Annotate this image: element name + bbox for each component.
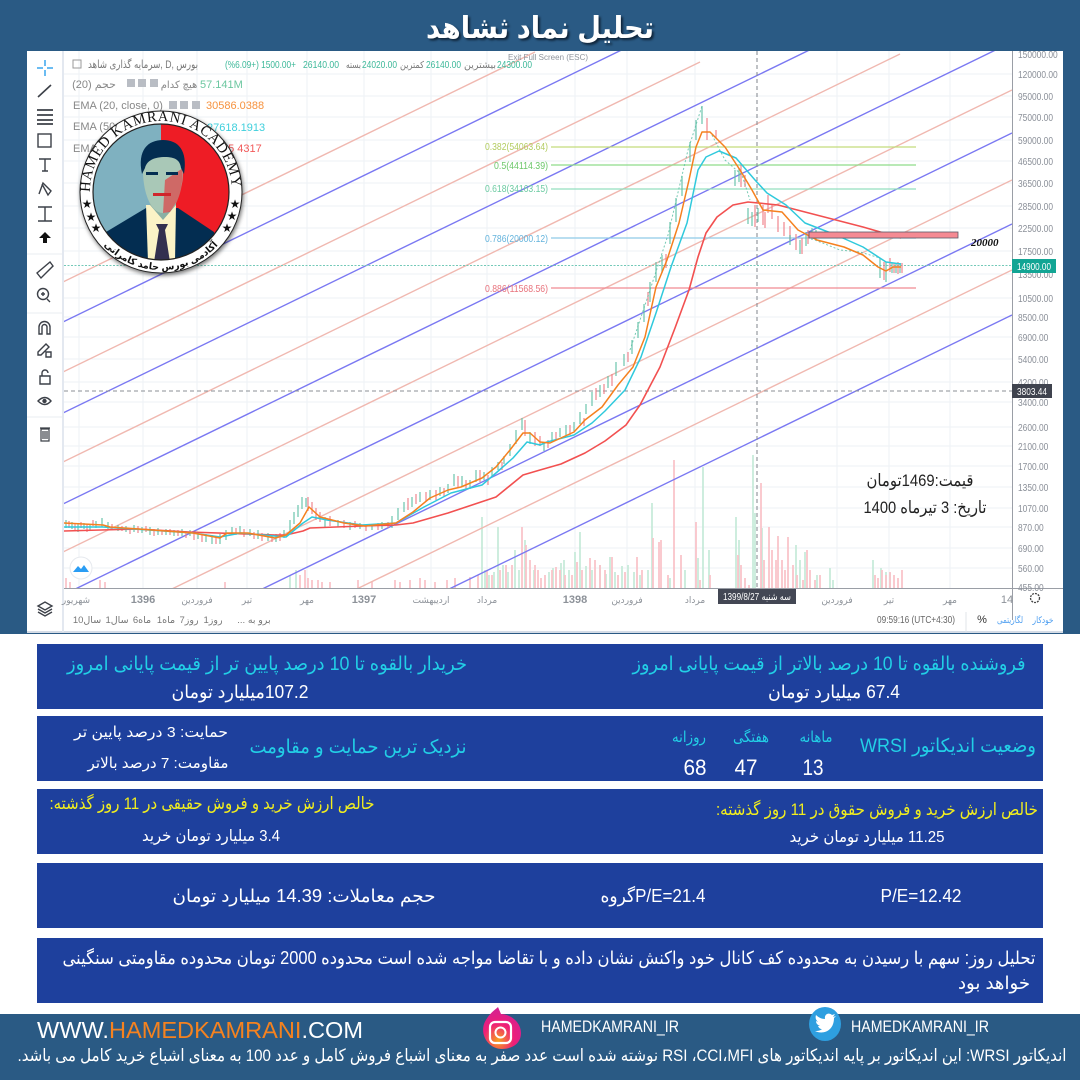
fibonacci levels: 0.382(54063.64) bbox=[485, 141, 548, 153]
logo badge: HAMED KAMRANI ACADEMY bbox=[80, 112, 242, 192]
fibonacci levels: 0.786(20000.12) bbox=[485, 233, 548, 245]
panel: WRSI and support resistance: وضعیت اندیکاتور WRSI bbox=[860, 736, 1036, 757]
price axis: 13500.00 bbox=[1018, 269, 1053, 281]
left drawing toolbar bbox=[27, 60, 62, 616]
channel lines bbox=[64, 51, 1012, 588]
logo badge bbox=[78, 110, 246, 278]
range toolbar: % bbox=[977, 614, 987, 626]
price axis: 690.00 bbox=[1018, 543, 1044, 555]
panel: valuation and volume: گروهP/E=21.4 bbox=[600, 885, 706, 907]
panel: lower white area bbox=[0, 634, 1080, 1014]
time axis: مهر bbox=[942, 595, 957, 605]
time axis: مهر bbox=[299, 595, 314, 605]
price axis: 22500.00 bbox=[1018, 223, 1053, 235]
price axis: 8500.00 bbox=[1018, 312, 1048, 324]
range toolbar: 09:59:16 (UTC+4:30) bbox=[877, 615, 955, 626]
price and date note: تاریخ: 3 تیرماه 1400 bbox=[864, 498, 987, 518]
chart legend: بورس ,D ,سرمایه گذاری شاهد bbox=[88, 58, 198, 71]
chart legend: هیچ کدام bbox=[161, 80, 197, 91]
price axis: 6900.00 bbox=[1018, 332, 1048, 344]
chart legend: 57.141M bbox=[200, 79, 243, 91]
panel: WRSI and support resistance bbox=[37, 716, 1043, 781]
panel: daily analysis bbox=[37, 938, 1043, 1003]
panel: net legal and real flows: 11.25 میلیارد تومان خرید bbox=[790, 829, 945, 847]
chart legend: EMA (50 bbox=[73, 121, 115, 133]
icon: crosshair bbox=[37, 60, 53, 76]
range toolbar: 1روز bbox=[203, 615, 223, 626]
price axis bbox=[64, 49, 1063, 620]
chart legend: حجم (20) bbox=[72, 79, 116, 91]
icon: trash bbox=[40, 428, 50, 441]
time axis: 1398 bbox=[563, 594, 587, 606]
price axis: 1350.00 bbox=[1018, 482, 1048, 494]
range toolbar: 1ماه bbox=[157, 615, 175, 626]
time axis: 14 bbox=[1001, 594, 1013, 606]
price axis: 2100.00 bbox=[1018, 441, 1048, 453]
panel: WRSI and support resistance: هفتگی bbox=[733, 728, 769, 746]
price axis: 75000.00 bbox=[1018, 112, 1053, 124]
logo badge: ★ bbox=[230, 197, 240, 211]
range toolbar: 1سال bbox=[105, 615, 129, 626]
range toolbar: لگاریتمی bbox=[997, 614, 1023, 625]
chart legend: بسته bbox=[346, 60, 361, 71]
chart legend: (%6.09+) 1500.00+ bbox=[225, 59, 296, 71]
chart legend: EMA bbox=[73, 143, 98, 155]
price axis: 560.00 bbox=[1018, 563, 1044, 575]
panel: WRSI and support resistance: حمایت: 3 درصد پایین تر bbox=[73, 724, 228, 742]
range toolbar: خودکار bbox=[1032, 615, 1054, 625]
price axis: 95000.00 bbox=[1018, 91, 1053, 103]
range toolbar: 10سال bbox=[73, 615, 101, 626]
title: تحلیل نماد ثشاهد bbox=[426, 12, 654, 45]
panel: net legal and real flows: 3.4 میلیارد تومان خرید bbox=[142, 828, 280, 846]
last price line bbox=[64, 264, 1012, 266]
chart legend: کمترین bbox=[400, 60, 424, 71]
price axis: 2600.00 bbox=[1018, 422, 1048, 434]
watermark button bbox=[70, 557, 92, 579]
fibonacci levels bbox=[485, 141, 916, 295]
range toolbar: 6ماه bbox=[133, 615, 151, 626]
panel: WRSI and support resistance: روزانه bbox=[672, 729, 706, 746]
time axis: شهریور bbox=[61, 595, 90, 605]
logo badge: ★ bbox=[82, 197, 92, 211]
icon: eye bbox=[38, 398, 51, 404]
price axis: 17500.00 bbox=[1018, 246, 1053, 258]
panel: potential seller and buyer: 107.2میلیارد تومان bbox=[172, 682, 308, 703]
price axis: 10500.00 bbox=[1018, 293, 1053, 305]
logo badge: ★ bbox=[227, 209, 237, 223]
time axis: 1397 bbox=[352, 594, 376, 606]
chart legend: 26140.00 bbox=[426, 59, 461, 71]
chart legend: 26140.00 bbox=[303, 59, 339, 71]
price axis: 14900.00 bbox=[1017, 261, 1051, 273]
panel: net legal and real flows bbox=[37, 789, 1043, 854]
panel: valuation and volume bbox=[37, 863, 1043, 928]
price axis: 3803.44 bbox=[1017, 386, 1047, 398]
range toolbar: 7روز bbox=[179, 615, 199, 626]
icon: lock bbox=[40, 370, 50, 384]
panel: daily analysis: تحلیل روز: سهم با رسیدن به محدوده کف کانال خود واکنش نشان داده و با تقاضا مواجه شده است محدوده 2000 تومان محدوده مقاومتی سنگینی bbox=[63, 947, 1036, 969]
chart legend: 85 4317 bbox=[222, 143, 262, 155]
logo badge: ★ bbox=[91, 221, 101, 235]
time axis: 1399/8/27 سه شنبه bbox=[723, 592, 791, 603]
price axis: 5400.00 bbox=[1018, 354, 1048, 366]
price axis: 1070.00 bbox=[1018, 503, 1048, 515]
logo badge: ★ bbox=[222, 221, 232, 235]
resistance zone bbox=[809, 232, 958, 238]
panel: potential seller and buyer: فروشنده بالقوه تا 10 درصد بالاتر از قیمت پایانی امروز bbox=[632, 654, 1026, 675]
resistance label: 20000 bbox=[970, 237, 999, 249]
icon: measure bbox=[38, 207, 52, 221]
time axis: تیر bbox=[883, 595, 895, 605]
panel: net legal and real flows: خالص ارزش خرید و فروش حقیقی در 11 روز گذشته: bbox=[50, 793, 375, 813]
icon: zoom bbox=[38, 288, 50, 302]
panel: WRSI and support resistance: مقاومت: 7 درصد بالاتر bbox=[86, 755, 228, 772]
chart legend: بیشترین bbox=[464, 60, 496, 71]
panel: potential seller and buyer: 67.4 میلیارد تومان bbox=[768, 682, 900, 703]
icon: pattern bbox=[39, 183, 51, 195]
panel: WRSI and support resistance: 13 bbox=[802, 755, 824, 780]
time axis: فروردین bbox=[821, 595, 853, 605]
price and date note: قیمت:1469تومان bbox=[866, 471, 974, 490]
time axis: مرداد bbox=[685, 595, 705, 605]
icon: trend line bbox=[38, 85, 51, 97]
panel: WRSI and support resistance: ماهانه bbox=[800, 729, 832, 746]
panel: valuation and volume: P/E=12.42 bbox=[880, 886, 962, 906]
price axis: 3400.00 bbox=[1018, 397, 1048, 409]
chart legend: 24020.00 bbox=[362, 59, 397, 71]
chart legend: Exit Full Screen (ESC) bbox=[508, 53, 588, 62]
price axis: 36500.00 bbox=[1018, 178, 1053, 190]
WRSI footnote: اندیکاتور WRSI: این اندیکاتور بر پایه اندیکاتور های MFI‏،‏CCI‏،‏ RSI نوشته شده است عدد صفر به معنای اشباع فروش کامل و عدد 100 به معنای اشباع خرید کامل می باشد. bbox=[18, 1046, 1067, 1066]
logo badge: ★ bbox=[86, 210, 96, 224]
time axis: فروردین bbox=[181, 595, 213, 605]
price axis: 1700.00 bbox=[1018, 461, 1048, 473]
icon: pencil lock bbox=[38, 344, 51, 357]
icon: rectangle bbox=[38, 134, 51, 147]
icon: instagram bbox=[483, 1007, 521, 1049]
panel: price chart bbox=[27, 51, 1063, 633]
volume bars bbox=[66, 455, 902, 588]
icon: twitter bbox=[809, 1007, 841, 1041]
panel: WRSI and support resistance: 68 bbox=[684, 755, 706, 780]
icon: magnet bbox=[39, 322, 50, 334]
chart legend: EMA (20, close, 0) bbox=[73, 100, 163, 112]
chart legend: 30586.0388 bbox=[206, 100, 264, 112]
panel: potential seller and buyer: خریدار بالقوه تا 10 درصد پایین تر از قیمت پایانی امروز bbox=[66, 654, 467, 675]
range toolbar bbox=[73, 612, 1054, 632]
crosshair lines bbox=[64, 51, 1012, 588]
portrait bbox=[106, 140, 214, 260]
panel: valuation and volume: حجم معاملات: 14.39 میلیارد تومان bbox=[173, 886, 436, 907]
panel: daily analysis: خواهد بود bbox=[958, 973, 1030, 994]
price axis: 28500.00 bbox=[1018, 201, 1053, 213]
price axis: 870.00 bbox=[1018, 522, 1044, 534]
time axis: مرداد bbox=[477, 595, 497, 605]
fibonacci levels: 0.5(44114.39) bbox=[494, 160, 548, 172]
icon: parallel lines bbox=[37, 110, 53, 124]
website: WWW.HAMEDKAMRANI.COM bbox=[37, 1017, 363, 1043]
chart legend: 24300.00 bbox=[497, 59, 532, 71]
fibonacci levels: 0.618(34163.15) bbox=[485, 183, 548, 195]
chart legend bbox=[72, 53, 588, 155]
price and date note bbox=[864, 471, 987, 518]
time axis bbox=[61, 589, 1040, 606]
EMA lines bbox=[64, 132, 901, 538]
logo badge: آکادمی بورس حامد کامرانی bbox=[104, 238, 218, 272]
price axis: 120000.00 bbox=[1018, 69, 1058, 81]
price axis: 59000.00 bbox=[1018, 135, 1053, 147]
footer bbox=[0, 1007, 1080, 1080]
chart legend: 27618.1913 bbox=[207, 122, 265, 134]
time axis: 1396 bbox=[131, 594, 155, 606]
fibonacci levels: 0.886(11568.56) bbox=[485, 283, 548, 295]
range toolbar: ... برو به bbox=[237, 615, 271, 626]
twitter handle: HAMEDKAMRANI_IR bbox=[851, 1018, 989, 1036]
icon: ruler bbox=[37, 262, 53, 278]
panel: net legal and real flows: خالص ارزش خرید و فروش حقوق در 11 روز گذشته: bbox=[716, 799, 1038, 819]
icon: text tool bbox=[39, 159, 51, 171]
candles bbox=[66, 106, 902, 544]
time axis: فروردین bbox=[611, 595, 643, 605]
panel: WRSI and support resistance: 47 bbox=[734, 755, 758, 780]
instagram handle: HAMEDKAMRANI_IR bbox=[541, 1018, 679, 1036]
panel: WRSI and support resistance: نزدیک ترین حمایت و مقاومت bbox=[250, 737, 466, 758]
panel: potential seller and buyer bbox=[37, 644, 1043, 709]
price axis: 46500.00 bbox=[1018, 156, 1053, 168]
time axis: تیر bbox=[241, 595, 253, 605]
price axis: 455.00 bbox=[1018, 582, 1044, 594]
time axis: اردیبهشت bbox=[412, 595, 450, 605]
price axis: 150000.00 bbox=[1018, 49, 1058, 61]
icon: layers bbox=[38, 602, 52, 616]
icon: arrow up bbox=[39, 232, 51, 243]
price axis: 4200.00 bbox=[1018, 377, 1048, 389]
